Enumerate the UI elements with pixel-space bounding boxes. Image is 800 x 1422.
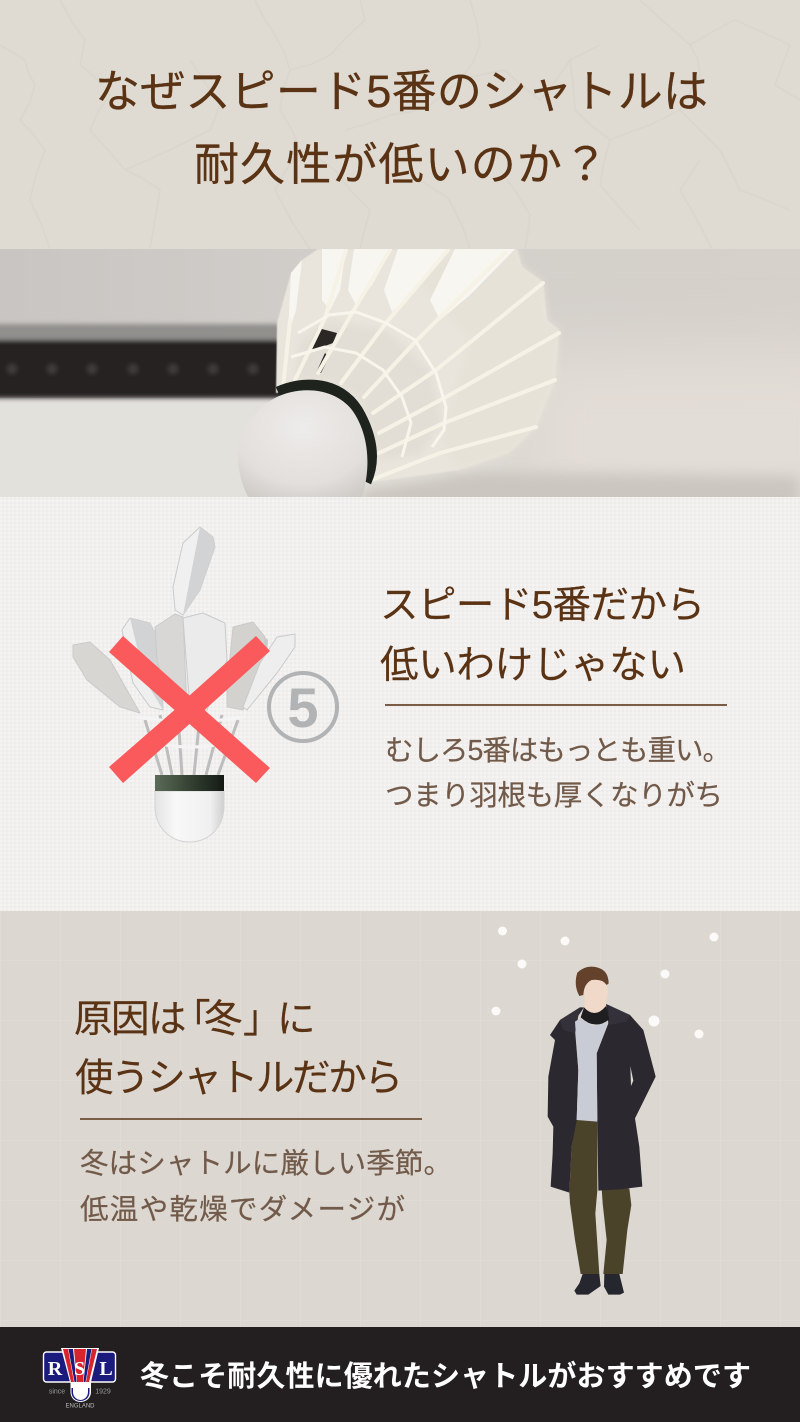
heading: winter: 冬	[204, 998, 243, 1041]
collar	[581, 1006, 609, 1025]
title: 耐久性が低いのか？	[194, 139, 608, 190]
text: winter explanation: 冬はシャトルに厳しい季節。	[80, 1148, 452, 1180]
face	[583, 979, 608, 1005]
panel: footer banner	[0, 1327, 800, 1422]
text: winter explanation: 低温や乾燥でダメージが	[80, 1194, 405, 1226]
cork	[238, 390, 367, 497]
logo: RSL: L	[99, 1358, 113, 1380]
shafts	[283, 250, 559, 480]
logo: RSL	[44, 1348, 116, 1410]
heading: speed 5: スピード5番だから	[380, 584, 705, 627]
text: recommendation: 冬こそ耐久性に優れたシャトルがおすすめです	[140, 1359, 751, 1393]
red cross	[109, 636, 270, 783]
logo: RSL: S	[74, 1358, 85, 1380]
icon: crossed out speed 5 shuttlecock	[73, 527, 337, 842]
photo: shuttlecock on court	[0, 249, 800, 497]
inner skirt shade	[296, 320, 442, 460]
title	[95, 66, 708, 190]
heading: speed 5	[380, 584, 705, 687]
heading: speed 5: 低いわけじゃない	[380, 644, 686, 687]
blurred net tape	[0, 324, 285, 398]
text: speed 5 explanation: つまり羽根も厚くなりがち	[385, 780, 723, 812]
shuttle feathers	[276, 249, 559, 483]
white vane tips	[289, 249, 515, 323]
illustration: man in winter coat	[548, 967, 656, 1295]
heading: winter: 使うシャトルだから	[75, 1057, 403, 1100]
logo: RSL: since	[49, 1388, 65, 1396]
cork	[155, 791, 224, 842]
hood highlight	[560, 1005, 630, 1033]
text: speed 5 explanation	[385, 735, 731, 812]
feathers	[73, 527, 295, 713]
shoes	[574, 1274, 601, 1295]
circled number five	[269, 673, 337, 741]
sweater	[575, 1018, 608, 1122]
heading: winter: 」	[243, 998, 282, 1041]
hair	[576, 967, 609, 996]
coat	[548, 1007, 584, 1193]
logo: RSL: 1929	[95, 1388, 111, 1396]
circled number five: 5	[287, 676, 319, 739]
panel: title header	[0, 0, 800, 249]
floor shadow	[362, 470, 800, 497]
cork band	[278, 385, 372, 482]
logo: RSL: ENGLAND	[65, 1404, 95, 1410]
trousers	[569, 1120, 599, 1274]
heading: winter: は	[148, 998, 187, 1041]
heading: winter	[74, 998, 403, 1100]
heading: winter: 因	[111, 998, 150, 1041]
dark gaps	[306, 328, 337, 373]
panel: winter is the cause	[0, 911, 800, 1327]
heading: winter: に	[277, 998, 316, 1041]
icon: snowflakes	[492, 926, 718, 1038]
text: winter explanation	[80, 1148, 452, 1226]
neck	[585, 995, 606, 1015]
skirt rings and struts	[145, 715, 238, 775]
panel: speed 5 is not the reason	[0, 497, 800, 911]
thread rings	[291, 312, 446, 457]
hand gap	[630, 1066, 633, 1086]
text: speed 5 explanation: むしろ5番はもっとも重い。	[385, 735, 731, 767]
heading: winter: 原	[74, 998, 113, 1041]
title: なぜスピード5番のシャトルは	[95, 66, 708, 117]
shuttle cork	[70, 1382, 91, 1402]
heading: winter: 「	[172, 998, 211, 1041]
logo: RSL: R	[48, 1358, 63, 1380]
